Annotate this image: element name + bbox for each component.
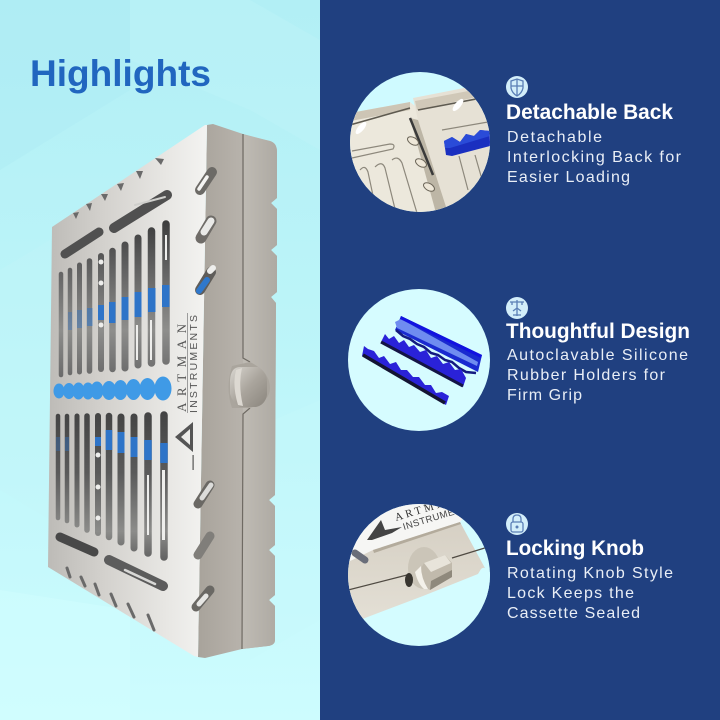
panel: right background — [320, 0, 720, 720]
blue rubber holder: middle — [381, 334, 466, 387]
heading: Thoughtful Design — [506, 320, 690, 343]
heading: Detachable Back — [506, 101, 673, 124]
top edge notches — [73, 158, 164, 219]
upper vertical slots — [61, 224, 166, 375]
panel: left background — [0, 0, 320, 720]
metal band — [348, 522, 486, 626]
logo text: INSTRUME — [402, 507, 456, 533]
brand logo: INSTRUMENTS — [188, 315, 200, 413]
description: Lock Keeps the — [507, 585, 634, 602]
upper blue silicone bands — [68, 285, 170, 330]
circle: thoughtful design photo — [348, 289, 490, 431]
title: Highlights — [30, 53, 211, 94]
description — [507, 347, 688, 404]
slots — [352, 122, 488, 213]
back notch — [478, 568, 490, 600]
blue rubber holder: lower — [362, 346, 449, 405]
description: Detachable — [507, 129, 602, 146]
icon: design tool — [506, 297, 528, 319]
circle: locking knob photo — [348, 497, 490, 646]
teardrop hole — [355, 553, 365, 560]
description: Interlocking Back for — [507, 149, 682, 166]
cassette back half — [242, 135, 277, 649]
description — [507, 129, 682, 186]
heading: Locking Knob — [506, 537, 644, 560]
description: Easier Loading — [507, 169, 630, 186]
hinge strip — [412, 118, 446, 210]
lower blue silicone bands — [56, 430, 168, 463]
blue silicone pills — [54, 376, 172, 400]
lower vertical slots — [58, 415, 164, 557]
teardrop slots — [196, 172, 213, 607]
cassette side wall — [198, 124, 277, 658]
text block: locking knob — [506, 537, 673, 622]
seam line — [242, 134, 250, 649]
icon: padlock — [506, 513, 528, 535]
long slots — [60, 195, 167, 586]
description: Cassette Sealed — [507, 605, 640, 622]
description: Autoclavable Silicone — [507, 347, 688, 364]
logo text: ARTMA — [393, 497, 449, 524]
circle: detachable back photo — [345, 71, 495, 213]
text block: detachable back — [506, 101, 682, 186]
knob — [405, 547, 452, 590]
bottom edge notches — [67, 568, 154, 630]
blue silicone holder — [444, 130, 490, 156]
icon: shield — [506, 76, 528, 98]
text block: thoughtful design — [506, 320, 690, 404]
latch holes — [356, 98, 464, 134]
brand logo — [174, 313, 200, 470]
logo text — [367, 504, 454, 540]
slot highlights — [96, 235, 167, 540]
white face — [349, 504, 462, 562]
left cassette panel — [345, 102, 440, 213]
blue rubber holder: channel — [395, 316, 482, 373]
description: Firm Grip — [507, 387, 582, 404]
description — [507, 565, 673, 622]
description: Rotating Knob Style — [507, 565, 673, 582]
brand logo: ARTMAN — [174, 323, 189, 412]
cassette front face — [48, 125, 207, 657]
description: Rubber Holders for — [507, 367, 666, 384]
seam — [348, 547, 488, 590]
illustration: steel cassette — [48, 124, 277, 658]
locking knob — [228, 362, 270, 408]
right cassette panel — [413, 88, 490, 209]
